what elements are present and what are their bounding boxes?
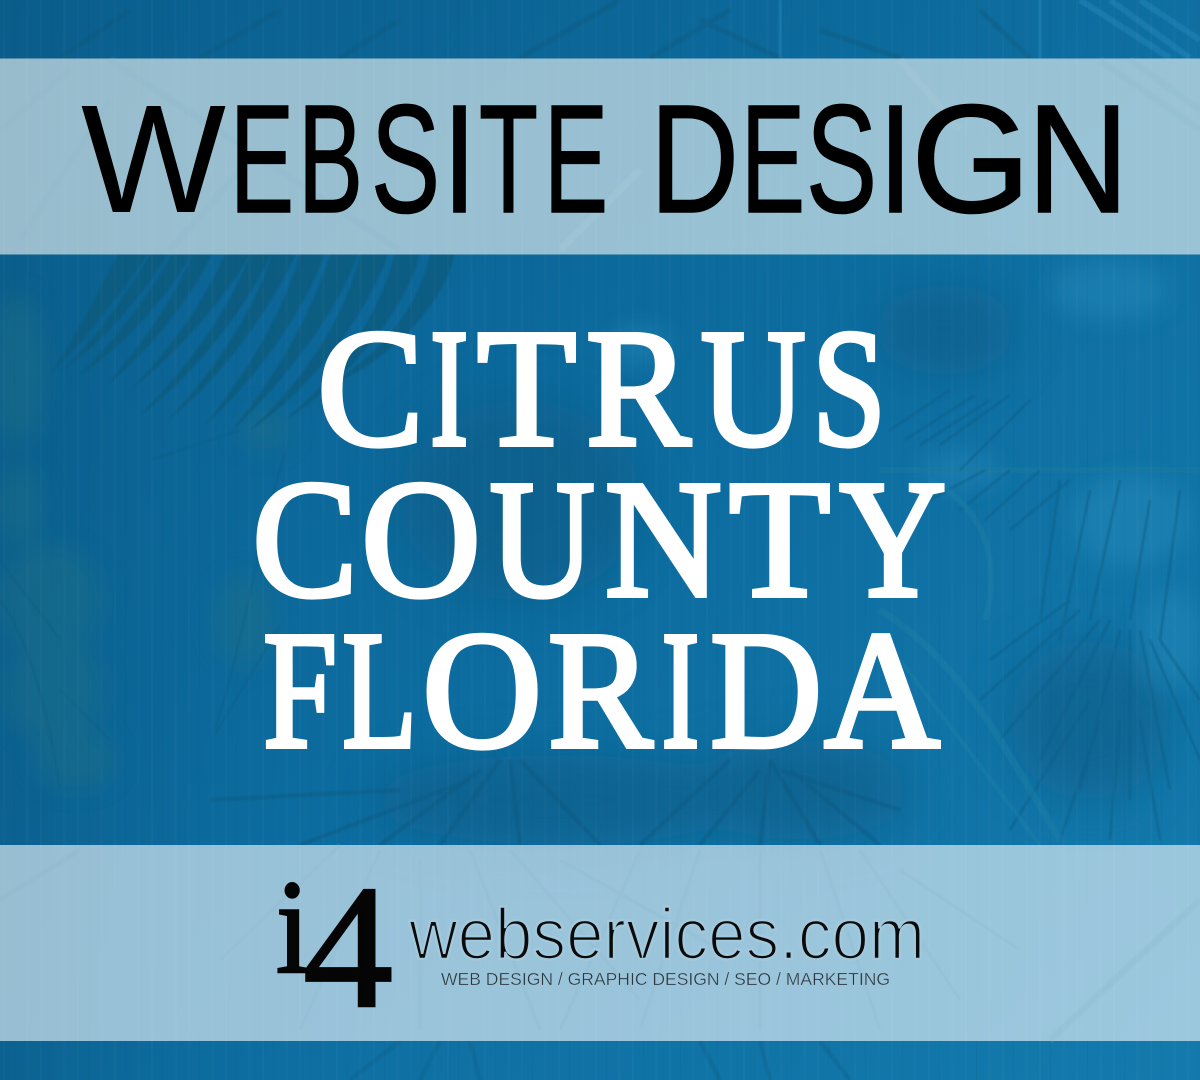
heading: website design: E [741, 73, 805, 245]
title line: county: Y [840, 446, 946, 632]
foliage: branches left [0, 430, 290, 790]
title line: citrus: U [701, 296, 806, 482]
foliage: bottom strip fronds [350, 1041, 850, 1080]
foliage: upper left palm frond [52, 254, 455, 435]
heading: website design: I [878, 73, 912, 245]
foliage: right palm fronds [880, 390, 1200, 840]
panel: bottom banner [0, 845, 1200, 1045]
title line: citrus: S [812, 296, 886, 482]
title: citrus county florida [252, 296, 946, 784]
foliage: palm trunk [880, 480, 1060, 845]
title line: florida: R [548, 598, 652, 784]
foliage: bright sky gaps right [610, 260, 1200, 690]
title line: county: O [361, 446, 481, 632]
foliage: bottom centre fronds [210, 760, 900, 845]
foliage: top right light streaks [780, 0, 1200, 58]
title line: county: U [490, 446, 595, 632]
title line: florida: O [422, 598, 542, 784]
heading: website design: E [544, 73, 608, 245]
heading: website design: N [1027, 73, 1129, 245]
banner: faint diagonal fronds [0, 60, 1200, 250]
title line: citrus: C [317, 296, 424, 482]
heading: website design: D [650, 73, 739, 245]
title line: citrus: I [430, 296, 468, 482]
banner: faint palm fronds [0, 845, 1200, 1040]
title line: citrus: T [477, 296, 576, 482]
heading: website design: S [371, 73, 440, 245]
heading: website design: T [479, 73, 538, 245]
foliage: dark crown shadows [370, 285, 1170, 845]
title line: county: C [252, 446, 358, 632]
logo: i4 mark: i [276, 853, 310, 1001]
heading: website design: E [230, 73, 294, 245]
title line: florida: F [263, 598, 337, 784]
title line: florida: A [824, 598, 940, 784]
logo: services tagline: WEB DESIGN / GRAPHIC DESIGN / SEO / MARKETING [441, 969, 890, 989]
heading: website design: S [806, 73, 877, 245]
title line: florida: D [710, 598, 822, 784]
foliage: top strip leaves [60, 0, 1030, 58]
logo: webservices.com wordmark: webservices.com [408, 895, 925, 975]
title line: florida: L [342, 598, 417, 784]
heading: website design: G [911, 73, 1031, 245]
heading: website design: I [442, 73, 476, 245]
title line: florida: I [662, 598, 699, 784]
logo: i4 mark: 4 [303, 850, 393, 1045]
panel: top banner [0, 58, 1200, 254]
foliage: left trees [0, 295, 290, 788]
title line: citrus: R [586, 296, 690, 482]
title line: county: T [729, 446, 830, 632]
heading: website design: B [298, 73, 363, 245]
title line: county: N [605, 446, 722, 632]
heading: website design: W [81, 73, 226, 245]
